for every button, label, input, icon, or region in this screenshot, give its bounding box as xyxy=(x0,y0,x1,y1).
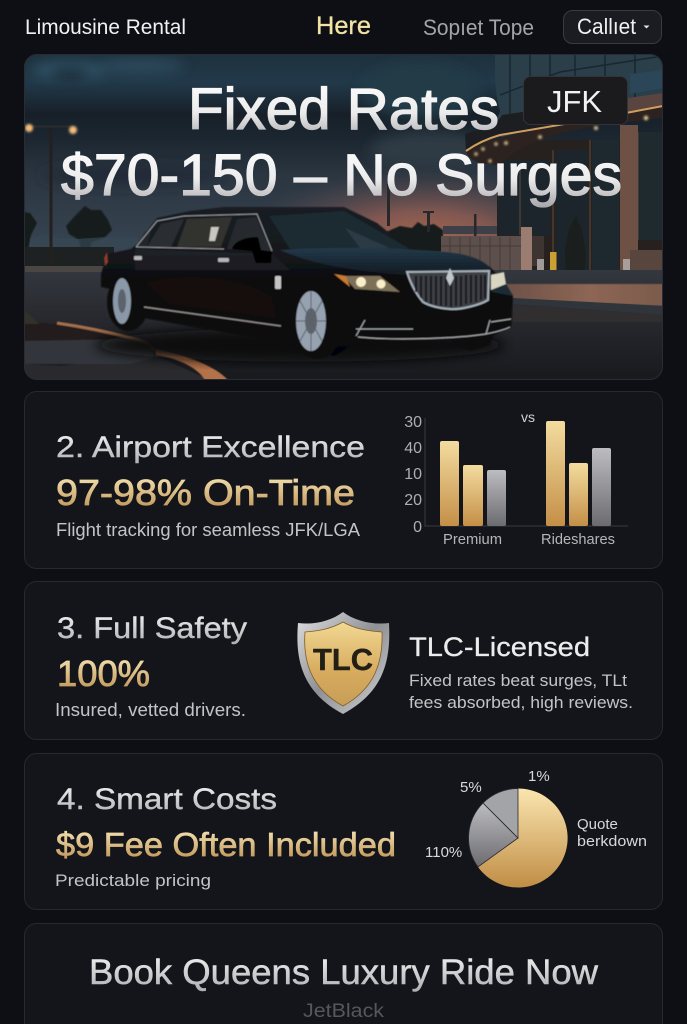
far ground band xyxy=(25,266,104,272)
bar chart: vs xyxy=(521,409,535,425)
TLC description: fees absorbed, high reviews. xyxy=(409,693,633,712)
horizon glow xyxy=(287,176,497,252)
car shadow xyxy=(95,328,505,362)
panel: airport excellence xyxy=(24,392,662,568)
hero heading: $70-150 – No Surges xyxy=(61,143,622,208)
fender xyxy=(491,272,513,296)
fee stat: $9 Fee Often Included xyxy=(56,826,396,863)
far front wheel xyxy=(450,336,494,346)
CTA heading: Book Queens Luxury Ride Now xyxy=(89,953,599,992)
distant buildings xyxy=(30,237,106,247)
canopy xyxy=(466,106,663,165)
traffic island xyxy=(24,310,228,380)
icon: TLC shield: TLC xyxy=(313,642,373,677)
window reflection xyxy=(209,227,219,241)
description: Predictable pricing xyxy=(55,871,211,890)
bar chart: 40 xyxy=(404,440,422,457)
pie chart: 110% xyxy=(425,844,462,861)
building lower wall and windows xyxy=(497,140,662,270)
bar chart: 0 xyxy=(413,519,422,536)
pie chart: 5% xyxy=(460,779,482,796)
street lamp xyxy=(25,124,77,267)
distant trees xyxy=(24,206,443,254)
limousine xyxy=(95,207,513,362)
active nav link: Here xyxy=(316,12,371,40)
pie chart: 1% xyxy=(528,768,550,785)
panel: smart costs xyxy=(24,754,662,910)
door belt highlight xyxy=(135,249,290,270)
shrub at entrance xyxy=(565,216,586,270)
sky xyxy=(24,54,663,254)
description: Flight tracking for seamless JFK/LGA xyxy=(56,520,360,540)
icon: TLC shield xyxy=(297,612,389,714)
TLC-licensed heading: TLC-Licensed xyxy=(409,632,590,662)
sill chrome xyxy=(144,307,281,326)
TLC description xyxy=(409,671,633,712)
car side windows xyxy=(139,231,150,246)
heading: 2. Airport Excellence xyxy=(56,431,365,464)
lower bumper trim xyxy=(356,319,511,339)
bar chart: 10 xyxy=(404,466,422,483)
hood xyxy=(280,248,492,275)
car body xyxy=(101,207,513,356)
bar chart: Rideshares xyxy=(541,531,615,548)
hedge xyxy=(24,247,114,266)
bar chart: 20 xyxy=(404,492,422,509)
clouds xyxy=(32,58,490,185)
on-time stat: 97-98% On-Time xyxy=(56,472,355,513)
side reflection xyxy=(146,277,276,318)
lower right planter wall xyxy=(630,250,662,270)
JFK badge: JFK xyxy=(547,84,602,119)
TLC description: Fixed rates beat surges, TLt xyxy=(409,671,627,690)
sidewalk xyxy=(500,284,663,306)
hero photo border xyxy=(24,54,662,380)
rear wheel rim xyxy=(113,278,131,324)
rear tail light xyxy=(104,252,108,266)
hero photo: limousine at dusk xyxy=(24,54,663,380)
front wheel xyxy=(294,290,338,355)
nav link: Sopıet Tope xyxy=(423,15,534,40)
navigation bar xyxy=(25,10,662,44)
heading: 4. Smart Costs xyxy=(57,783,277,816)
bar chart: Premium xyxy=(443,531,502,548)
warm road reflection xyxy=(513,313,662,322)
nav button: Callıet xyxy=(577,14,636,39)
nav button xyxy=(564,10,662,44)
pie chart: Quote xyxy=(577,816,618,833)
door handles xyxy=(134,256,281,289)
mirror xyxy=(232,237,272,263)
pie chart: berkdown xyxy=(577,833,647,850)
rear wheel tire xyxy=(106,288,146,332)
hero heading: Fixed Rates xyxy=(188,77,499,142)
distant light poles xyxy=(387,184,476,238)
panel: call to action xyxy=(24,924,662,1024)
heading: 3. Full Safety xyxy=(57,612,247,645)
100% stat: 100% xyxy=(57,653,150,694)
pie chart xyxy=(425,768,647,887)
JFK badge xyxy=(524,76,628,124)
building upper glass xyxy=(465,54,663,137)
panel: full safety xyxy=(24,582,662,740)
grille xyxy=(407,268,489,309)
hero heading xyxy=(61,77,622,208)
windshield xyxy=(269,211,410,249)
window trim xyxy=(136,214,272,251)
headlights xyxy=(334,272,506,292)
road xyxy=(24,270,663,380)
warm pillar xyxy=(620,125,638,280)
partner name: JetBlack xyxy=(303,1001,385,1022)
bar chart: 30 xyxy=(404,414,422,431)
brand name: Limousine Rental xyxy=(25,16,186,39)
bar chart xyxy=(404,409,628,548)
description: Insured, vetted drivers. xyxy=(55,700,246,720)
fence and posts xyxy=(441,227,630,270)
